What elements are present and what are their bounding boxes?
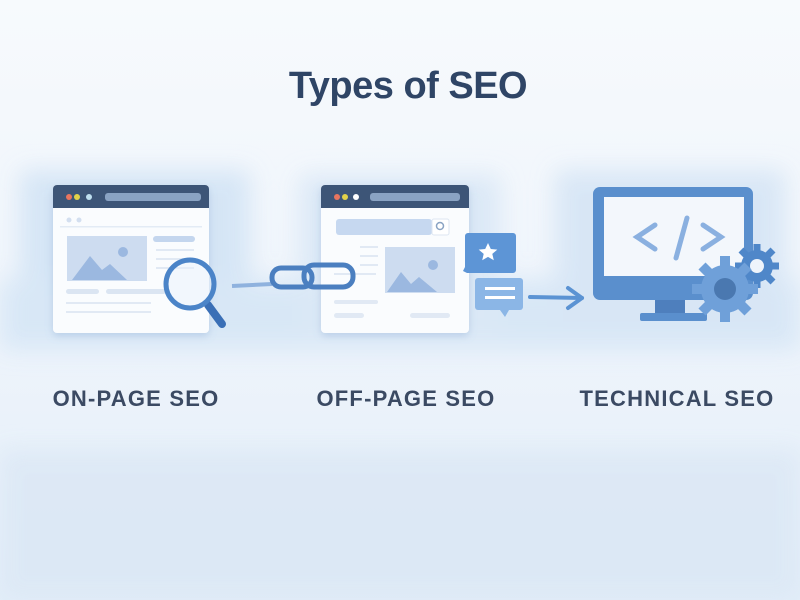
title: Types of SEO — [289, 65, 527, 107]
label: off-page: OFF-PAGE SEO — [316, 386, 496, 411]
icon: on-page browser window — [53, 185, 209, 333]
background wash — [0, 170, 800, 600]
arrow — [530, 288, 582, 308]
icon: monitor with code — [593, 187, 753, 321]
icon: gears — [692, 244, 779, 322]
icon: star review bubble — [463, 233, 516, 273]
label: on-page: ON-PAGE SEO — [53, 386, 219, 411]
icon: comment bubble — [475, 278, 523, 317]
label: technical: TECHNICAL SEO — [580, 386, 774, 411]
icon: chain link — [232, 265, 353, 287]
icon: magnifier — [166, 260, 222, 324]
icon: off-page browser window — [321, 185, 469, 333]
